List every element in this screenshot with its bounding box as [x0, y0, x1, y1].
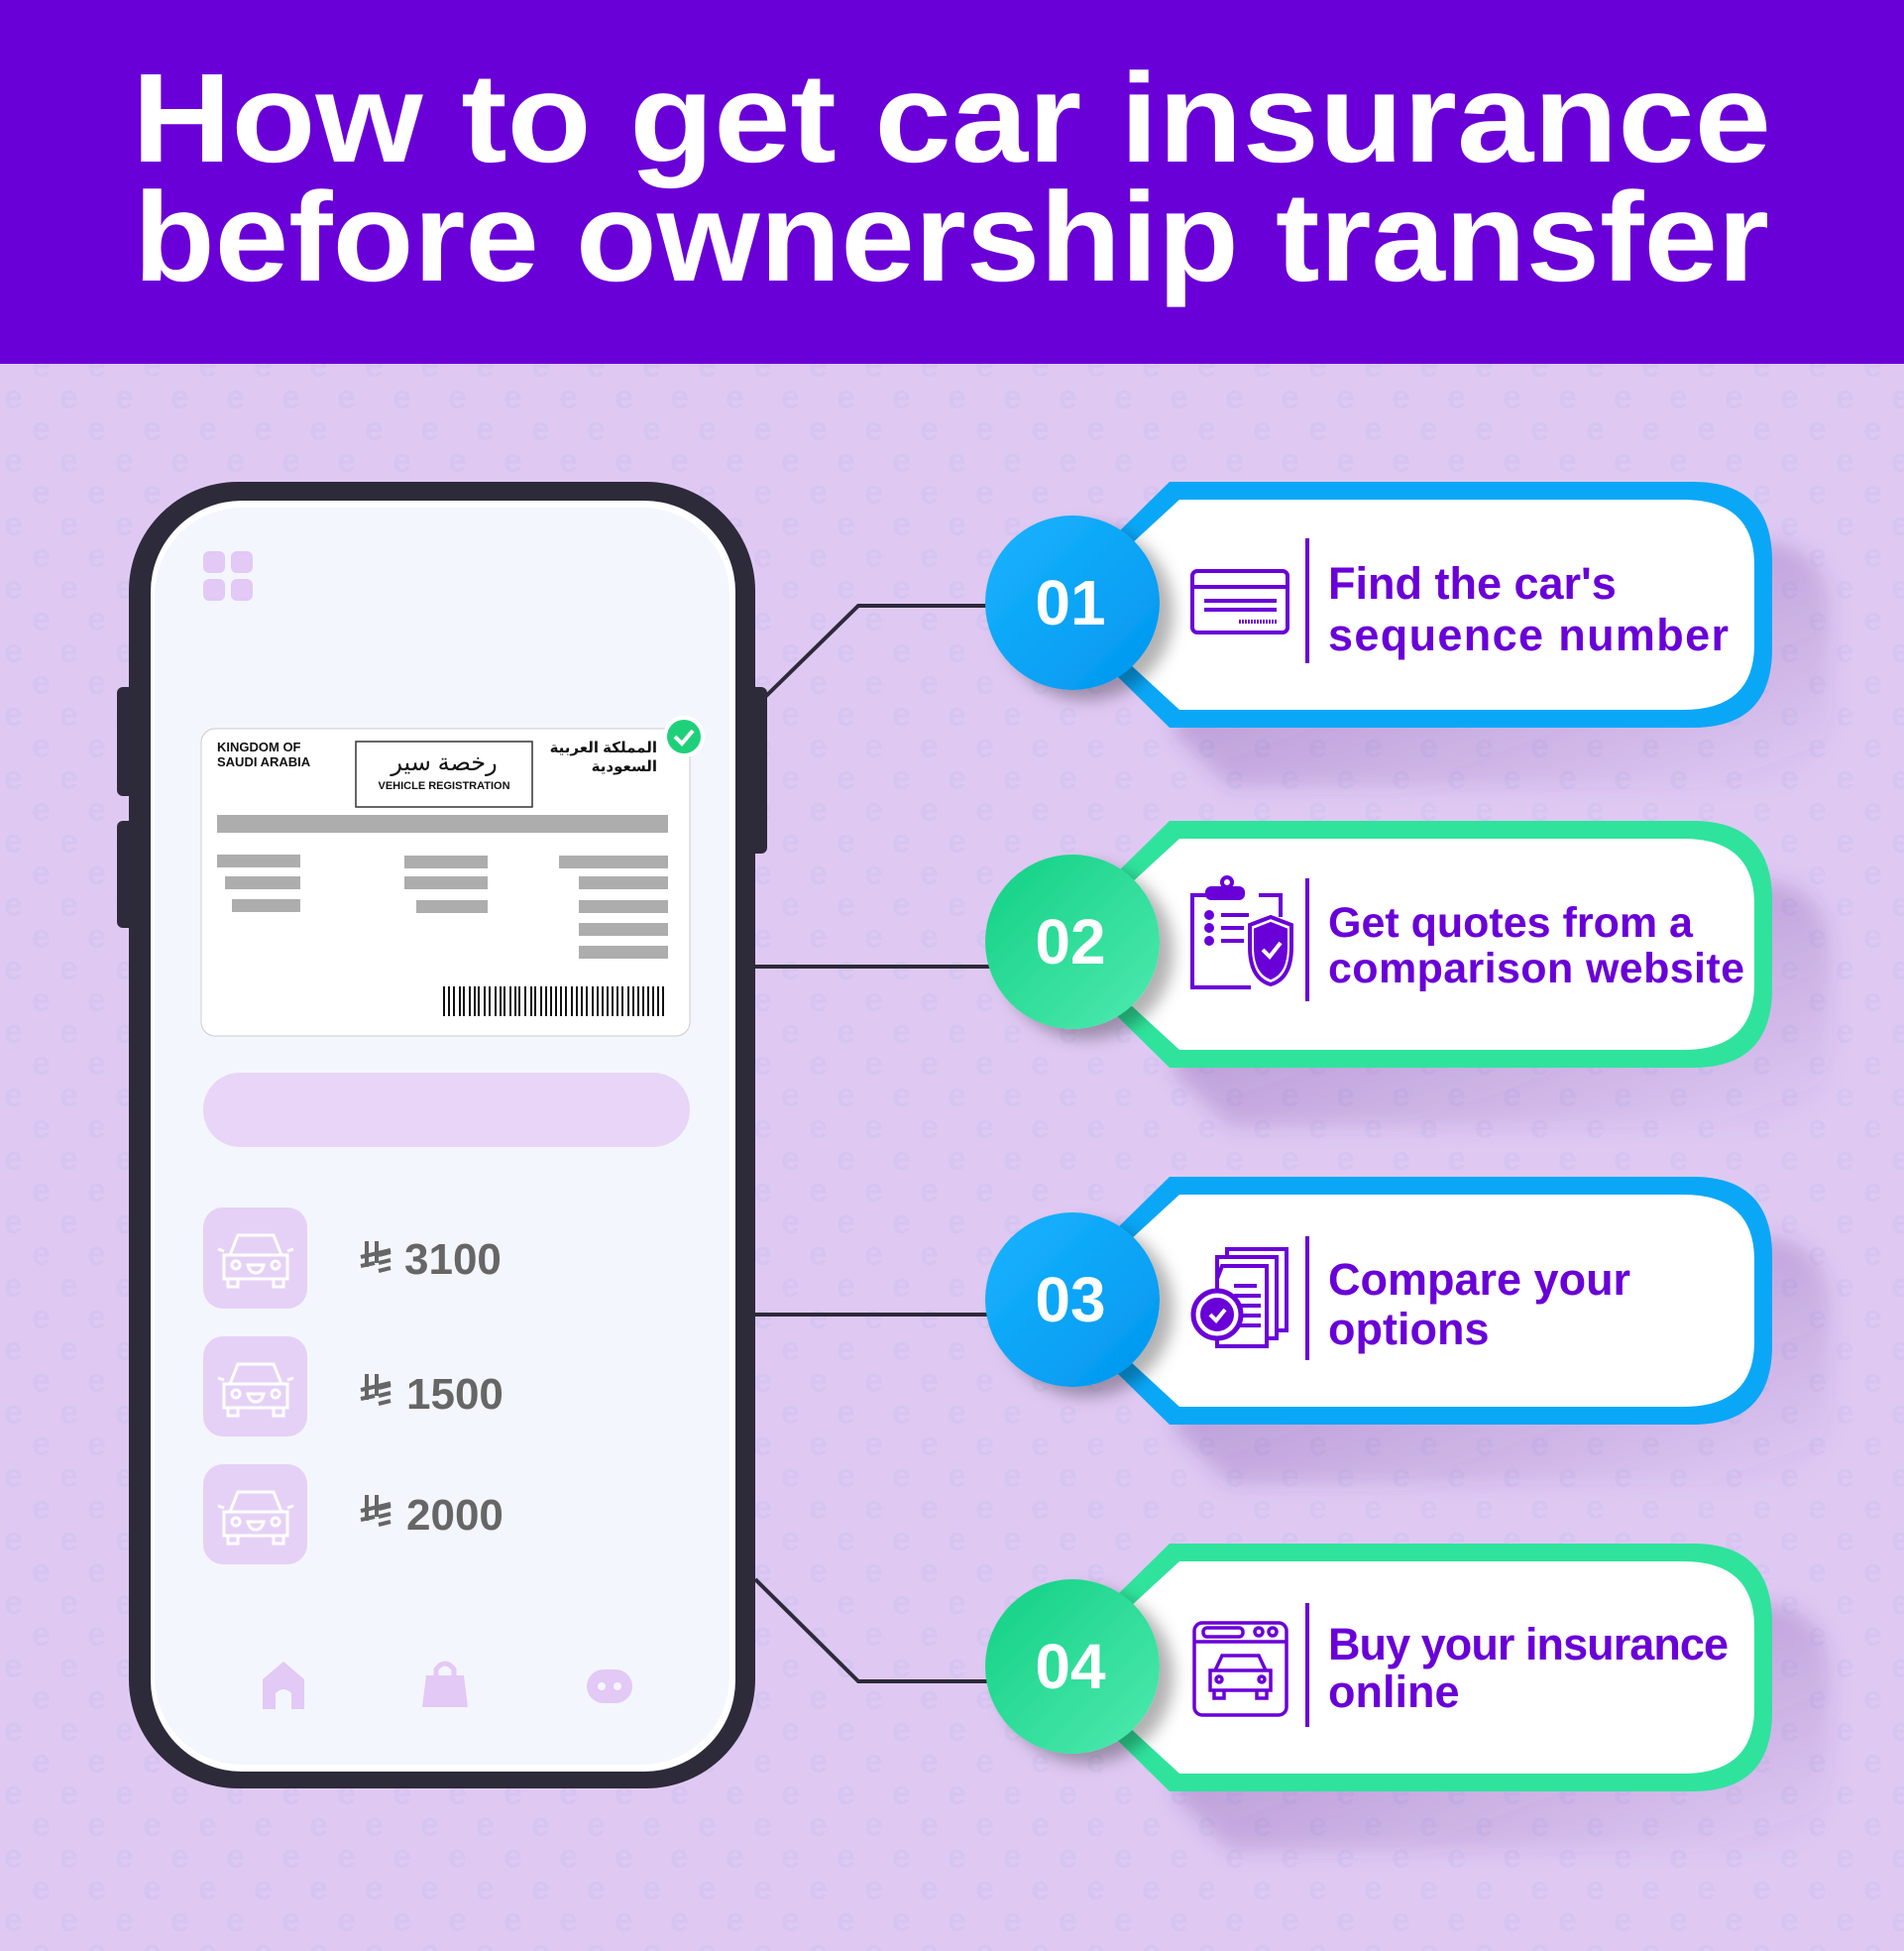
- icon: card: [1192, 571, 1288, 632]
- icon: documents check: [1193, 1249, 1287, 1346]
- step 3: [985, 1177, 1832, 1484]
- vehicle registration card: [201, 729, 690, 1036]
- nav icons: [263, 1662, 632, 1709]
- icon: clipboard shield: [1192, 877, 1291, 987]
- badge 02: 02: [1035, 906, 1106, 977]
- text: step 3: options: [1328, 1304, 1489, 1354]
- text: step 3: [1328, 1254, 1630, 1354]
- step 1: [985, 482, 1832, 787]
- text: step 2: comparison website: [1328, 945, 1744, 992]
- text: step 4: Buy your insurance: [1328, 1619, 1729, 1669]
- badge 03: [985, 1212, 1160, 1387]
- icon: check badge: [663, 716, 705, 757]
- text: step 1: sequence number: [1328, 610, 1729, 660]
- vehicle registration card: KINGDOM OF: [217, 740, 301, 754]
- badge 04: [985, 1579, 1160, 1754]
- search pill: [203, 1073, 690, 1147]
- text: step 2: Get quotes from a: [1328, 899, 1694, 947]
- title: before ownership transfer: [134, 167, 1769, 308]
- price row 3: [203, 1464, 504, 1564]
- vehicle registration card: السعودية: [592, 758, 657, 775]
- text: step 4: [1328, 1619, 1729, 1717]
- price row 2: 1500: [406, 1370, 504, 1419]
- text: step 2: [1328, 899, 1744, 992]
- price row 2: [203, 1336, 504, 1436]
- phone: [117, 482, 767, 1788]
- title: [132, 48, 1771, 308]
- vehicle registration card: VEHICLE REGISTRATION: [378, 780, 510, 792]
- side buttons: [117, 687, 137, 796]
- vehicle registration card: المملكة العربية: [550, 740, 657, 756]
- connector lines: [755, 606, 995, 1681]
- text: step 1: [1328, 558, 1729, 660]
- badge 01: [985, 516, 1160, 690]
- vehicle registration card: SAUDI ARABIA: [217, 754, 311, 769]
- text: step 4: online: [1328, 1666, 1459, 1717]
- text: step 3: Compare your: [1328, 1254, 1630, 1305]
- price row 1: [203, 1207, 502, 1309]
- price row 3: 2000: [406, 1491, 504, 1540]
- step 4: [985, 1544, 1832, 1851]
- badge 03: 03: [1035, 1264, 1106, 1335]
- icon: browser car: [1194, 1623, 1287, 1715]
- badge 04: 04: [1035, 1631, 1106, 1702]
- badge 01: 01: [1035, 567, 1106, 638]
- text: step 1: Find the car's: [1328, 558, 1617, 609]
- vehicle registration card: رخصة سير: [390, 749, 498, 776]
- title: How to get car insurance: [132, 48, 1771, 189]
- badge 02: [985, 855, 1160, 1029]
- icon: app grid: [203, 551, 253, 601]
- header banner: [0, 0, 1904, 364]
- step 2: [985, 821, 1832, 1127]
- price row 1: 3100: [404, 1235, 502, 1284]
